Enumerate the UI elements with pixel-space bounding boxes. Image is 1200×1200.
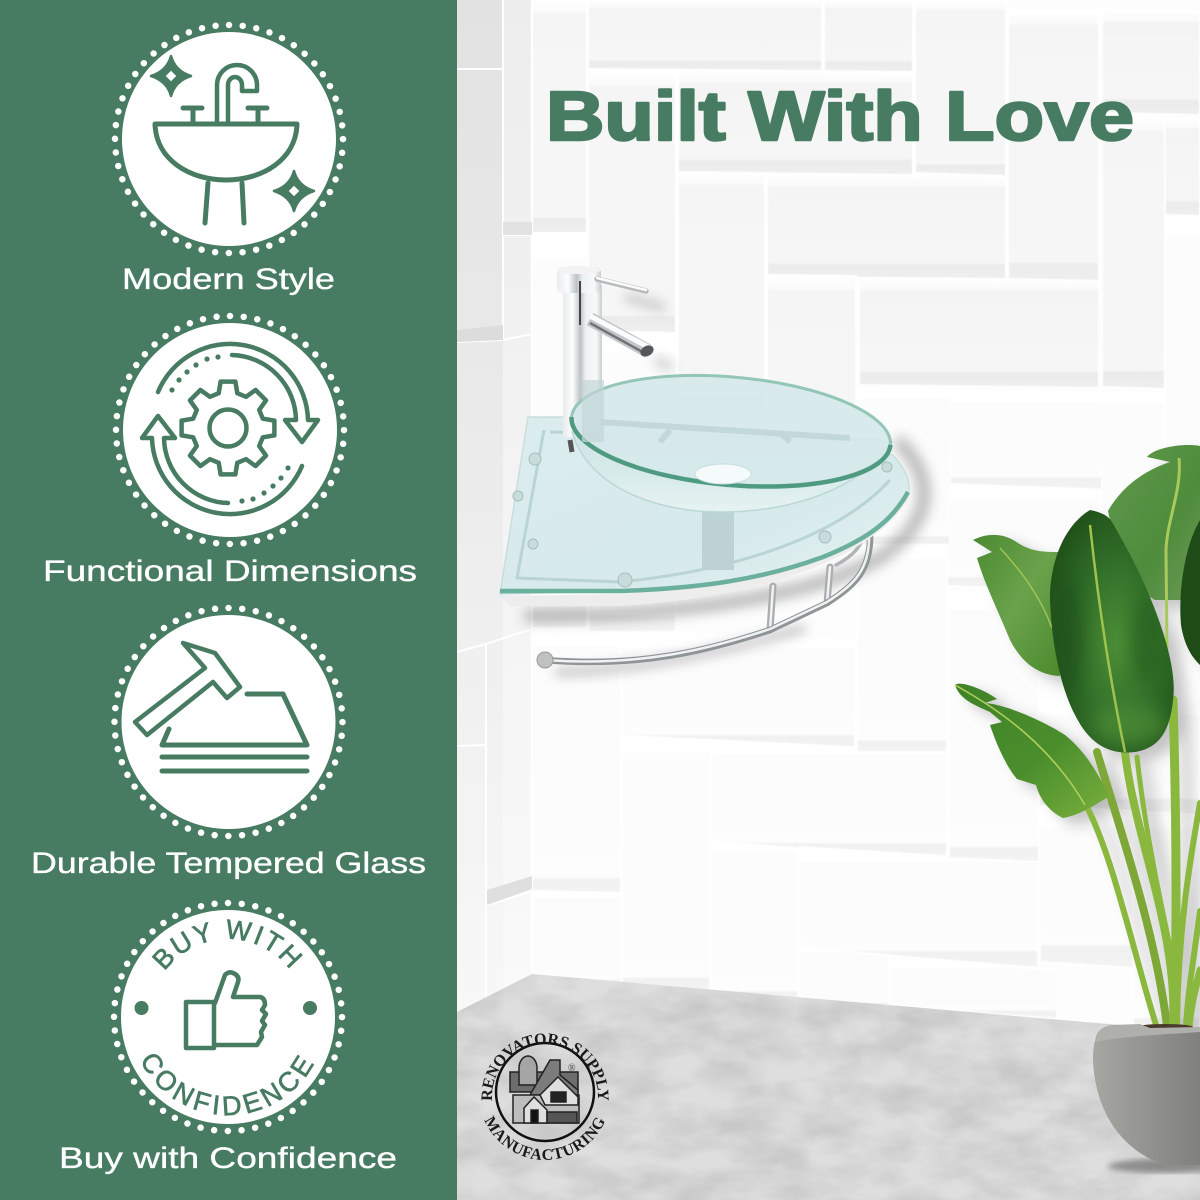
stems	[1080, 700, 1200, 1028]
badge dots	[134, 1001, 317, 1015]
icon: sink with sparkles	[151, 56, 314, 223]
shelf front glass edge	[500, 492, 908, 591]
label: modern style: Modern Style	[122, 263, 335, 296]
icon: thumbs up	[186, 972, 266, 1048]
badge text: confidence: CONFIDENCE	[142, 1054, 314, 1116]
label: functional dimensions: Functional Dimensions	[43, 555, 417, 588]
background: tiled wall	[457, 0, 1200, 1050]
feature: buy with confidence	[59, 900, 397, 1175]
bowl interior bracket reflections	[600, 422, 850, 442]
icon: hammer on glass sheets	[135, 643, 307, 771]
left upper leaf	[973, 535, 1060, 676]
bowl drain	[695, 464, 751, 484]
shelf inner edges and fittings	[517, 430, 890, 582]
towel bar	[537, 530, 870, 668]
big leaf colour mottling	[1054, 580, 1168, 745]
left green panel	[0, 0, 457, 1200]
product: glass sink with faucet and towel bar	[500, 266, 924, 672]
logo ring	[496, 1043, 594, 1141]
feature: modern style	[115, 25, 343, 296]
glass bowl body	[572, 432, 892, 512]
faucet	[557, 266, 656, 452]
soil	[1137, 1024, 1193, 1030]
drain pipe	[702, 512, 734, 570]
shelf underside	[500, 490, 910, 606]
glass bowl rim and interior	[567, 363, 895, 499]
pot shadow	[1108, 1159, 1200, 1173]
far right dark leaf	[1180, 520, 1200, 665]
concrete pot	[1093, 1028, 1200, 1165]
logo text top: RENOVATORS SUPPLY	[481, 1033, 609, 1101]
label: durable tempered glass: Durable Tempered Glass	[31, 847, 426, 880]
background: marble floor	[457, 970, 1200, 1200]
big central leaf	[1050, 510, 1174, 753]
plant in concrete pot	[955, 445, 1200, 1173]
feature: durable tempered glass	[31, 608, 426, 880]
leaves and stems	[955, 445, 1200, 1028]
feature: functional dimensions	[43, 316, 417, 588]
logo text bottom: MANUFACTURING	[484, 1115, 604, 1160]
lower left leaf	[955, 684, 1110, 818]
title: Built With Love	[546, 77, 1134, 155]
label: buy with confidence: Buy with Confidence	[59, 1142, 397, 1175]
badge text: buy with: BUY WITH	[152, 919, 303, 970]
back leaf	[1108, 445, 1200, 600]
icon: gear with circular arrows	[142, 344, 318, 514]
registered mark: ®	[568, 1063, 576, 1074]
logo: renovators supply manufacturing	[481, 1033, 609, 1160]
logo house	[510, 1056, 579, 1123]
sink shadows	[525, 297, 924, 672]
glass shelf	[500, 417, 909, 594]
